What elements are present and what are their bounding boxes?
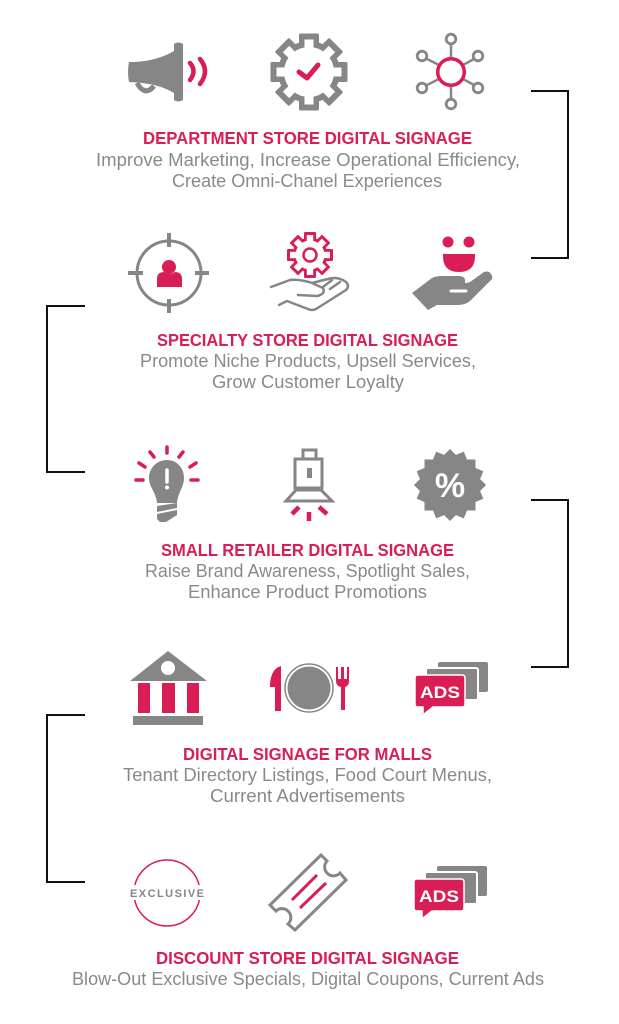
icon: target person	[128, 233, 209, 313]
heading: malls: DIGITAL SIGNAGE FOR MALLS	[183, 744, 432, 764]
panel: discount store	[72, 855, 544, 989]
panel: specialty store	[128, 232, 492, 392]
icon: ads speech bubbles: ADS	[420, 683, 460, 702]
text: small retailer benefits: Raise Brand Awareness, Spotlight Sales,	[145, 561, 470, 581]
text: department store benefits	[96, 150, 520, 191]
icon: percent badge	[414, 449, 486, 521]
icon: network hub	[417, 34, 483, 109]
heading: department store: DEPARTMENT STORE DIGITAL SIGNAGE	[143, 128, 472, 148]
icon: spotlight	[286, 450, 332, 521]
panel: small retailer	[136, 447, 486, 602]
text: specialty store benefits	[140, 351, 476, 392]
heading: small retailer: SMALL RETAILER DIGITAL SIGNAGE	[161, 540, 454, 560]
text: malls benefits: Current Advertisements	[210, 786, 405, 806]
text: department store benefits: Create Omni-Chanel Experiences	[172, 171, 442, 191]
text: specialty store benefits: Grow Customer Loyalty	[212, 372, 404, 392]
heading: discount store: DISCOUNT STORE DIGITAL SIGNAGE	[156, 948, 459, 968]
icon: ads speech bubbles	[415, 662, 488, 715]
icon: exclusive seal: EXCLUSIVE	[130, 888, 204, 900]
bracket: right top	[531, 91, 568, 258]
heading: specialty store: SPECIALTY STORE DIGITAL SIGNAGE	[157, 330, 458, 350]
icon: gear with check	[270, 34, 348, 110]
text: small retailer benefits	[145, 561, 470, 602]
bracket: left bottom	[47, 715, 85, 882]
icon: ticket	[270, 855, 346, 930]
text: specialty store benefits: Promote Niche Products, Upsell Services,	[140, 351, 476, 371]
icon: hand with smile	[412, 236, 492, 310]
icon: hand with gear	[271, 232, 348, 310]
text: discount store benefits: Blow-Out Exclusive Specials, Digital Coupons, Current Ads	[72, 969, 544, 989]
text: malls benefits	[123, 765, 492, 806]
icon: exclusive seal	[128, 860, 206, 926]
text: malls benefits: Tenant Directory Listings, Food Court Menus,	[123, 765, 492, 785]
text: department store benefits: Improve Marketing, Increase Operational Efficiency,	[96, 150, 520, 170]
icon: megaphone	[128, 42, 205, 102]
bracket: right lower	[531, 500, 568, 667]
panel: malls	[123, 651, 492, 806]
icon: ads speech bubbles: ADS	[419, 887, 459, 906]
icon: bank building	[130, 651, 207, 725]
text: small retailer benefits: Enhance Product Promotions	[188, 582, 427, 602]
icon: ads speech bubbles	[414, 866, 487, 919]
icon: light bulb	[136, 447, 198, 522]
icon: percent badge: %	[435, 467, 465, 505]
panel: department store	[96, 34, 520, 191]
icon: plate and cutlery	[270, 664, 349, 712]
bracket: left upper	[47, 306, 85, 472]
